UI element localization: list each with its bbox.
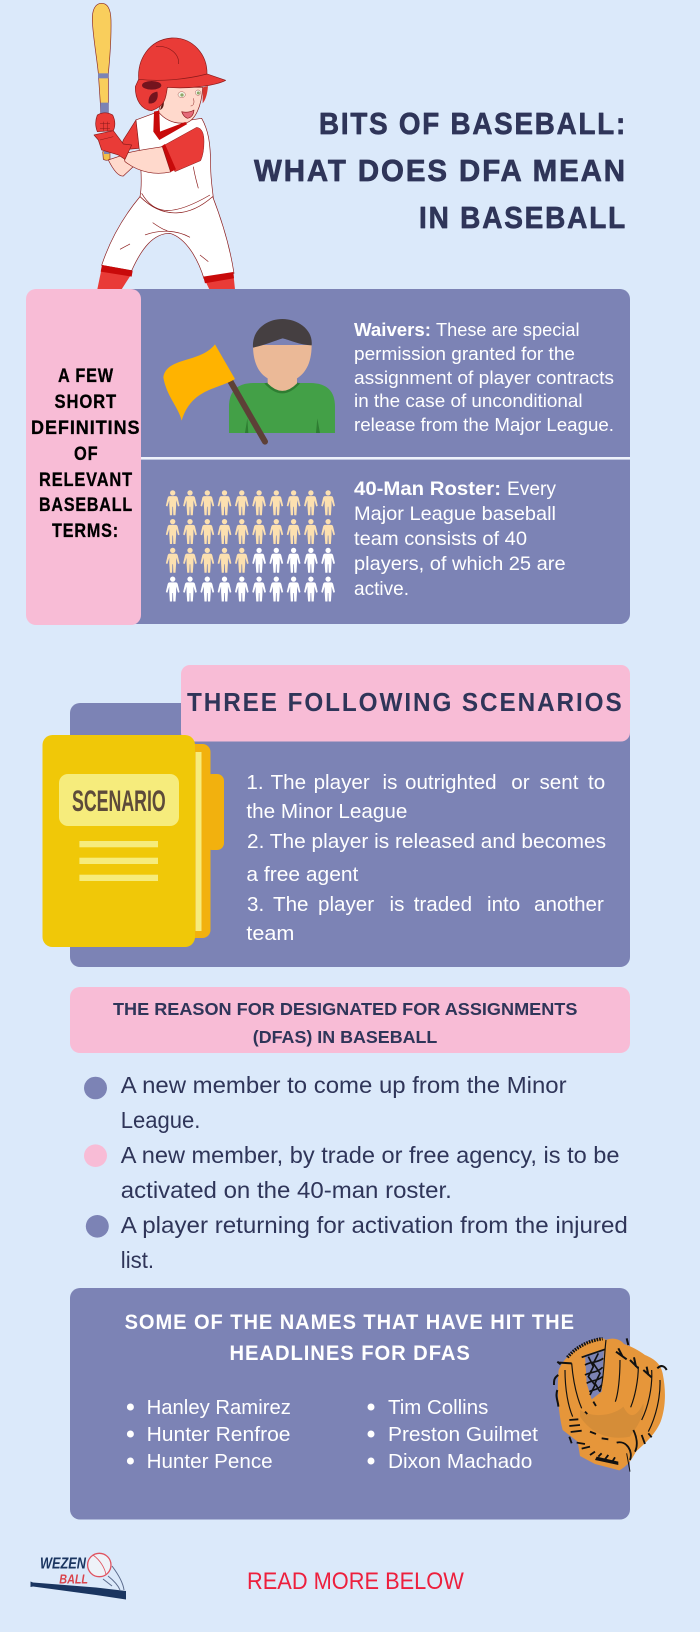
bullet: reason three [86,1212,628,1273]
heading: names: HEADLINES FOR DFAS [230,1341,471,1365]
list: names column one: Hunter Pence [147,1451,273,1473]
text: scenario list: another [534,893,604,916]
text: 40-man roster: players, of which 25 are [354,553,566,575]
text: scenario list: sent [540,771,579,794]
logo: Wezen Ball: WEZEN [40,1555,87,1572]
heading: three following scenarios [181,665,630,742]
text: 40-man roster: team consists of 40 [354,528,527,550]
panel: definitions [26,289,630,625]
heading: names: SOME OF THE NAMES THAT HAVE HIT THE [125,1310,575,1334]
text: scenario list: into [487,893,520,916]
bullet: reason three: list. [121,1247,154,1273]
sidebar: few short definitions: DEFINITINS [31,418,140,439]
text: scenario list [246,771,606,945]
text: scenario list: to [588,771,605,794]
list: names column one: Hunter Renfroe [147,1424,290,1446]
list: names column two: Preston Guilmet [388,1424,538,1446]
heading: three following scenarios: THREE FOLLOWING SCENARIOS [187,689,624,717]
text: 40-man roster: Every [507,478,556,500]
bullet: reason one: League. [121,1107,200,1133]
text: 40-man roster [354,478,566,600]
text: scenario list: 1. [246,771,264,794]
text: waivers: Waivers: [354,319,431,340]
text: scenario list: traded [414,893,472,916]
text: scenario list: the Minor League [246,800,407,823]
list: reasons [84,1072,628,1273]
banner: the reason for DFAs [70,987,630,1053]
list: names column two [368,1397,538,1473]
logo ball [88,1553,111,1577]
text: scenario list: player [314,771,370,794]
text: scenario list: is [382,771,397,794]
bullet: reason three: A player returning for activation from the injured [121,1212,628,1238]
text: 40-man roster: Major League baseball [354,503,556,525]
text: scenario list: outrighted [405,771,497,794]
logo bat [30,1582,126,1600]
list: names column one [127,1397,291,1473]
text: waivers: permission granted for the [354,343,575,364]
icon: scenario folder: SCENARIO [72,785,166,818]
title: BITS OF BASEBALL: [319,106,627,141]
text: 40-man roster: 40-Man Roster: [354,478,501,500]
text: 40-man roster: active. [354,578,409,600]
list: names column two: Dixon Machado [388,1451,532,1473]
text: scenario list: 3. [247,893,264,916]
text: waivers [354,319,614,435]
title: WHAT DOES DFA MEAN [254,153,627,188]
text: scenario list: The [271,771,306,794]
text: waivers: These are special [436,319,580,340]
sidebar: few short definitions: TERMS: [52,521,119,542]
logo: Wezen Ball: BALL [59,1572,88,1586]
text: waivers: release from the Major League. [354,414,614,435]
logo: Wezen Ball [30,1553,126,1600]
text: waivers: in the case of unconditional [354,390,583,411]
icon: baseball glove [554,1338,667,1472]
title: IN BASEBALL [419,200,627,235]
sidebar: few short definitions: A FEW [58,366,114,387]
sidebar: few short definitions: OF [74,444,98,465]
text: scenario list: is [390,893,404,916]
heading: names [125,1310,575,1365]
sidebar: few short definitions: BASEBALL [39,495,133,516]
text: scenario list: a free agent [246,863,359,886]
text: waivers: assignment of player contracts [354,367,614,388]
illustration: baseball batter [92,3,235,289]
panel: three following scenarios [42,665,630,967]
sidebar: few short definitions: SHORT [54,392,117,413]
banner: the reason for DFAs: THE REASON FOR DESIGNATED FOR ASSIGNMENTS [113,999,577,1019]
sidebar: few short definitions: RELEVANT [39,470,133,491]
text: scenario list: or [511,771,530,794]
bullet: reason two [84,1142,620,1203]
list: names column two: Tim Collins [388,1397,488,1419]
call to action: read more below: READ MORE BELOW [247,1568,464,1595]
bullet: reason two: A new member, by trade or free agency, is to be [121,1142,620,1168]
bullet: reason one [84,1072,567,1133]
bullet: reason two: activated on the 40-man roster. [121,1177,452,1203]
icon: person with flag [163,319,335,442]
list: names column one: Hanley Ramirez [147,1397,291,1419]
panel: names in the headlines [70,1288,630,1520]
text: scenario list: player [318,893,374,916]
sidebar: few short definitions [26,289,141,625]
icon: scenario folder [42,735,224,947]
banner: the reason for DFAs: (DFAS) IN BASEBALL [253,1027,438,1047]
text: scenario list: team [246,922,294,945]
bullet: reason one: A new member to come up from the Minor [121,1072,567,1098]
text: scenario list: 2. The player is released and becomes [247,830,606,853]
text: scenario list: The [273,893,308,916]
icon: 40 person roster grid [166,490,335,601]
title [254,106,627,235]
